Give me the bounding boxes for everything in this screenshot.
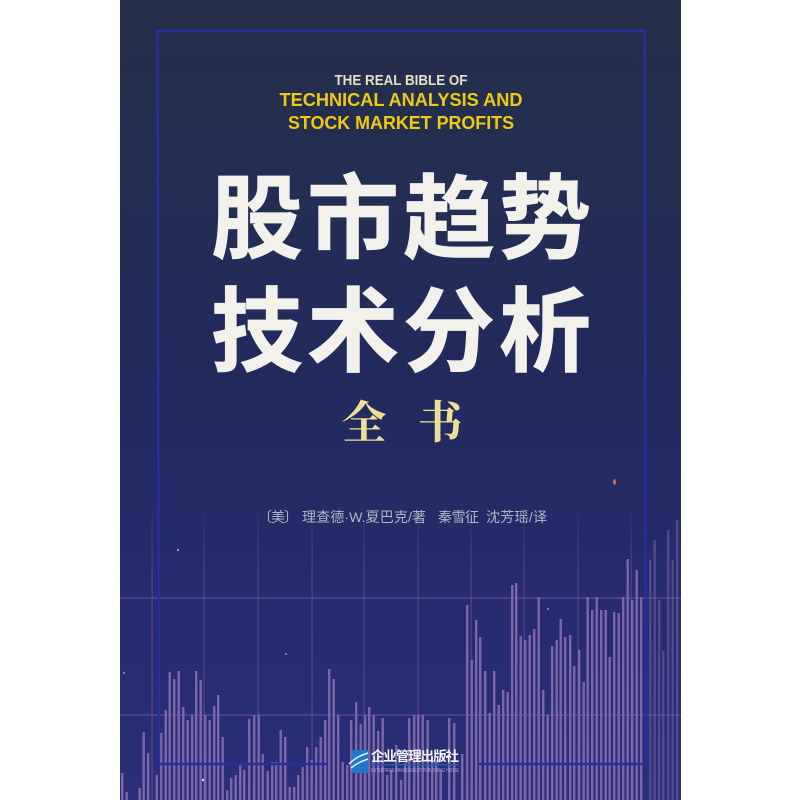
specks [123, 479, 616, 781]
main title line 1: 股市趋势 [211, 169, 591, 271]
translator two: 沈芳瑶/译 [486, 509, 547, 525]
icon: publisher emblem [349, 750, 368, 773]
author nationality: 〔美〕 [258, 509, 298, 525]
translator one: 秦雪征 [438, 509, 479, 525]
English title line 1: THE REAL BIBLE OF [334, 73, 468, 89]
chart: grid lines [120, 500, 681, 800]
subtitle: 全书 [342, 398, 463, 448]
panel: cover background [120, 0, 681, 800]
heading: main Chinese title [211, 169, 591, 384]
publisher rule [371, 764, 459, 766]
publisher name: 企业管理出版社 [371, 748, 460, 764]
chart: volume bars [121, 559, 642, 800]
heading: English title [280, 73, 522, 133]
publisher logo [349, 748, 460, 774]
frame: blue border [158, 31, 646, 764]
author name: 理查德·W.夏巴克/著 [302, 509, 426, 525]
chart: faded bars beyond the frame [649, 520, 678, 800]
English title line 3: STOCK MARKET PROFITS [288, 112, 514, 133]
author and translators [258, 509, 547, 525]
main title line 2: 技术分析 [211, 282, 591, 384]
English title line 2: TECHNICAL ANALYSIS AND [280, 89, 522, 110]
publisher English name: ENTERPRISE MANAGEMENT PUBLISHING HOUSE [371, 768, 459, 774]
